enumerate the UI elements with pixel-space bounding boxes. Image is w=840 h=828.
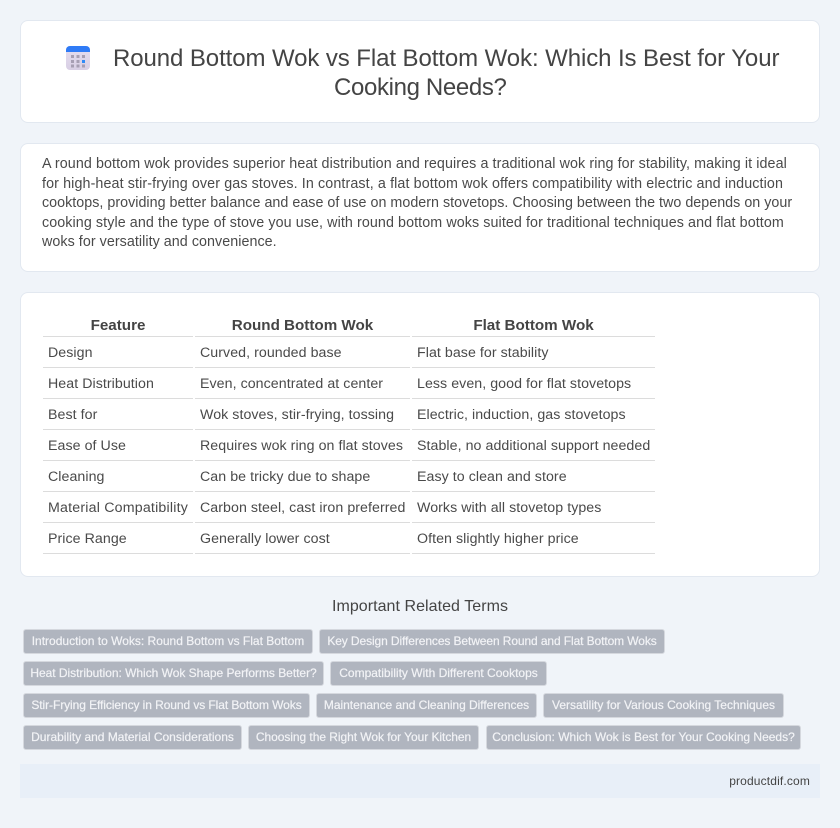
comparison table: Heat Distribution [48,376,154,392]
comparison table: Less even, good for flat stovetops [417,376,631,392]
comparison table: Generally lower cost [200,531,330,547]
text block: introduction: cooktops, providing better balance and ease of use on modern stovetops. Choosing between the two depends on your [42,195,792,211]
heading: related terms: Important Related Terms [332,598,508,615]
comparison table: Wok stoves, stir-frying, tossing [200,407,394,423]
panel: comparison table [20,292,820,577]
title [113,45,780,101]
comparison table: Price Range [48,531,127,547]
text block: introduction: A round bottom wok provides superior heat distribution and requires a traditional wok ring for stability, making it ideal [42,156,787,172]
comparison table: Material Compatibility [48,500,188,516]
comparison table: Electric, induction, gas stovetops [417,407,626,423]
comparison table: Design [48,345,93,361]
comparison table: Works with all stovetop types [417,500,601,516]
related term tags: Choosing the Right Wok for Your Kitchen [256,730,471,744]
footer source text: productdif.com [729,774,810,788]
comparison table: Carbon steel, cast iron preferred [200,500,405,516]
comparison table: Round Bottom Wok [232,317,373,334]
comparison table [43,317,655,554]
related term tags: Conclusion: Which Wok is Best for Your Cooking Needs? [492,730,795,744]
comparison table: Ease of Use [48,438,126,454]
comparison table: Often slightly higher price [417,531,579,547]
related term tags: Stir-Frying Efficiency in Round vs Flat Bottom Woks [31,698,302,712]
comparison table: Curved, rounded base [200,345,342,361]
comparison table: Flat base for stability [417,345,548,361]
text block: introduction: woks for versatility and convenience. [42,234,277,250]
comparison table: Best for [48,407,97,423]
comparison table: Stable, no additional support needed [417,438,650,454]
comparison table: Can be tricky due to shape [200,469,370,485]
comparison table: Easy to clean and store [417,469,567,485]
comparison table: Even, concentrated at center [200,376,383,392]
panel: introduction [20,143,820,272]
related term tags: Durability and Material Considerations [31,730,234,744]
related term tags: Heat Distribution: Which Wok Shape Performs Better? [30,666,317,680]
related term tags: Maintenance and Cleaning Differences [324,698,529,712]
title: Cooking Needs? [334,74,507,101]
text block: introduction: for high-heat stir-frying over gas stoves. In contrast, a flat bottom wok offers compatibility with electric and induction [42,176,783,192]
panel: header [20,20,820,123]
footer [20,764,820,798]
related term tags: Versatility for Various Cooking Techniques [552,698,775,712]
text block: introduction [42,156,792,250]
related term tags: Compatibility With Different Cooktops [339,666,538,680]
icon: calendar [66,46,90,70]
related term tags [23,629,801,750]
comparison table: Cleaning [48,469,104,485]
related term tags: Introduction to Woks: Round Bottom vs Flat Bottom [32,634,304,648]
comparison table: Flat Bottom Wok [473,317,594,334]
comparison table: Feature [91,317,145,334]
related term tags: Key Design Differences Between Round and Flat Bottom Woks [327,634,657,648]
text block: introduction: cooking style and the type of stove you use, with round bottom woks suited for traditional techniques and flat bottom [42,214,784,230]
title: Round Bottom Wok vs Flat Bottom Wok: Which Is Best for Your [113,45,779,72]
comparison table: Requires wok ring on flat stoves [200,438,403,454]
